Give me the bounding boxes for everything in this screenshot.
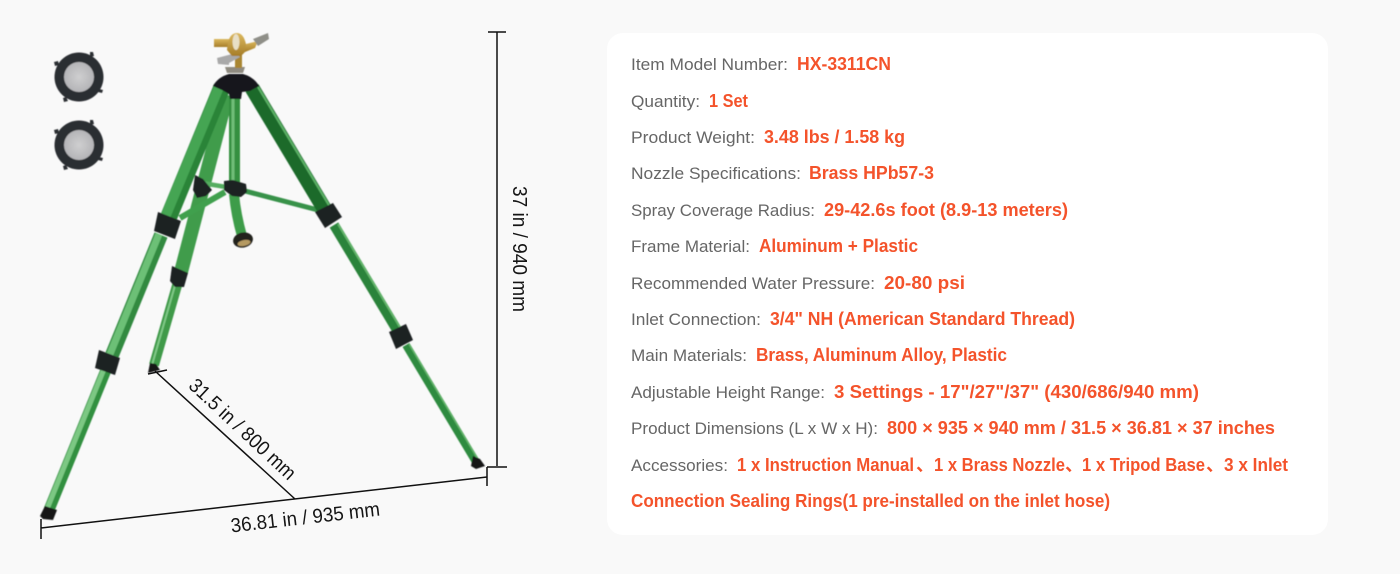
- spec: accessories: 1 x Brass Nozzle: [934, 455, 1065, 475]
- hub cap: [213, 74, 259, 99]
- spec: spray coverage radius: 29-42.6s foot (8.9-13 meters): [824, 200, 1068, 220]
- spec: accessories: [631, 455, 1288, 511]
- left leg: [47, 87, 222, 510]
- spec: spray coverage radius: [631, 200, 1068, 220]
- dimension: width: 36.81 in / 935 mm: [230, 499, 381, 537]
- spec: main materials: Brass, Aluminum Alloy, Plastic: [756, 345, 1007, 365]
- back leg: [152, 95, 227, 365]
- spec: main materials: [631, 345, 1007, 365]
- icon: sealing ring top: [54, 52, 104, 102]
- spec: main materials: Main Materials:: [631, 346, 747, 365]
- dimension: depth: [148, 370, 300, 499]
- spec: product dimensions: [631, 418, 1275, 438]
- spec: accessories: 1 x Tripod Base: [1082, 455, 1205, 475]
- spec: item model number: Item Model Number:: [631, 55, 788, 74]
- icon: sealing ring bottom: [54, 120, 104, 170]
- tripod sprinkler illustration: [40, 33, 485, 520]
- spec: nozzle specifications: Nozzle Specifications:: [631, 164, 801, 183]
- spec: item model number: [631, 54, 891, 74]
- spec: nozzle specifications: [631, 163, 934, 183]
- spec: product weight: 3.48 lbs / 1.58 kg: [764, 127, 905, 147]
- spec: item model number: HX-3311CN: [797, 54, 891, 74]
- spec: quantity: 1 Set: [709, 91, 748, 111]
- spec: inlet connection: 3/4" NH (American Standard Thread): [770, 309, 1075, 329]
- spec: adjustable height range: 3 Settings - 17"/27"/37" (430/686/940 mm): [834, 382, 1199, 402]
- spec: recommended water pressure: Recommended Water Pressure:: [631, 274, 875, 293]
- clamps: [95, 175, 413, 375]
- spec: inlet connection: Inlet Connection:: [631, 310, 761, 329]
- spec: inlet connection: [631, 309, 1075, 329]
- spec: frame material: Aluminum + Plastic: [759, 236, 918, 256]
- spec: accessories: 1 x Instruction Manual: [737, 455, 914, 475]
- spec: accessories: 3 x Inlet: [1224, 455, 1288, 475]
- spec: frame material: Frame Material:: [631, 237, 750, 256]
- hose inlet fitting: [232, 231, 254, 249]
- spec: adjustable height range: Adjustable Height Range:: [631, 383, 825, 402]
- spec: recommended water pressure: [631, 273, 965, 293]
- spec: accessories: 、: [916, 455, 934, 475]
- dimension: width: [41, 467, 507, 539]
- spec: accessories: 、: [1065, 455, 1083, 475]
- spec: recommended water pressure: 20-80 psi: [884, 273, 965, 293]
- sprinkler head: [214, 33, 269, 73]
- center pole: [233, 96, 242, 236]
- right leg: [252, 87, 479, 462]
- spec: nozzle specifications: Brass HPb57-3: [809, 163, 934, 183]
- spec: frame material: [631, 236, 918, 256]
- spec: adjustable height range: [631, 382, 1199, 402]
- spec: product weight: [631, 127, 905, 147]
- spec: quantity: [631, 91, 748, 111]
- spec: spray coverage radius: Spray Coverage Radius:: [631, 201, 815, 220]
- spec: accessories: Connection Sealing Rings(1 pre-installed on the inlet hose): [631, 491, 1110, 511]
- spec: accessories: Accessories:: [631, 456, 728, 475]
- panel: specifications card: [607, 33, 1328, 535]
- braces: [180, 183, 318, 218]
- spec: product dimensions: Product Dimensions (L x W x H):: [631, 419, 878, 438]
- dimension: depth: 31.5 in / 800 mm: [184, 375, 300, 485]
- spec: accessories: 、: [1206, 455, 1224, 475]
- dimension: height: 37 in / 940 mm: [508, 186, 530, 312]
- spec: quantity: Quantity:: [631, 92, 700, 111]
- spec: product dimensions: 800 × 935 × 940 mm / 31.5 × 36.81 × 37 inches: [887, 418, 1275, 438]
- leg feet: [40, 363, 485, 520]
- dimension: height: [488, 32, 530, 466]
- spec: product weight: Product Weight:: [631, 128, 755, 147]
